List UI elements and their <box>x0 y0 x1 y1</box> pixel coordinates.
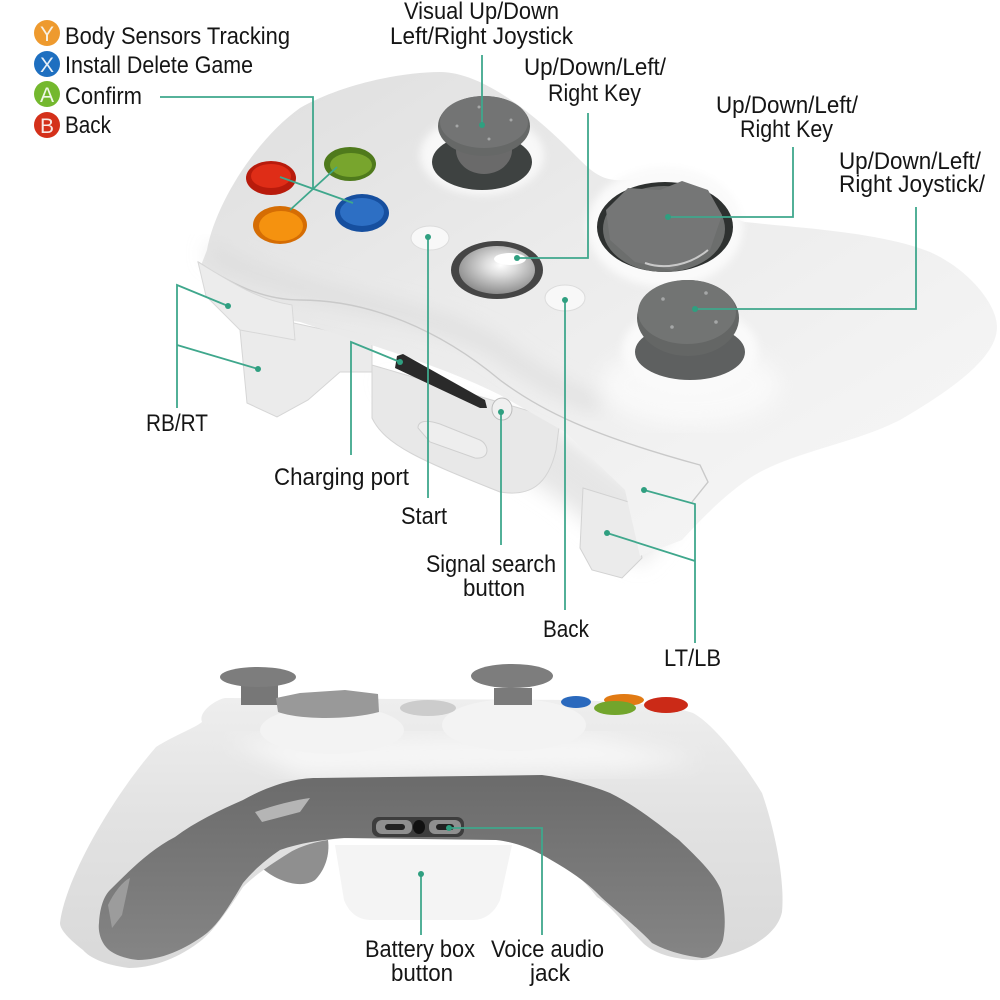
label: visual joystick <box>390 0 574 50</box>
legend B: Back <box>65 112 112 139</box>
label: right key d-pad: Up/Down/Left/ <box>716 92 858 119</box>
colour buttons <box>246 147 389 244</box>
label: signal search <box>426 551 556 602</box>
right trigger LT <box>580 488 642 578</box>
label: right key guide: Up/Down/Left/ <box>524 54 666 81</box>
label: voice audio jack <box>491 936 604 987</box>
label: right key d-pad <box>716 92 858 143</box>
label: voice audio jack: jack <box>529 960 571 987</box>
legend X: Install Delete Game <box>65 52 253 79</box>
back and start buttons <box>411 226 449 250</box>
label: LT/LB: LT/LB <box>664 645 721 672</box>
d-pad <box>587 167 743 287</box>
ports <box>372 817 464 837</box>
left joystick well and cap <box>420 115 544 195</box>
legend X: X <box>40 54 54 77</box>
grey panel <box>99 775 725 960</box>
label: signal search: button <box>463 575 525 602</box>
battery box <box>335 845 512 920</box>
left trigger RT <box>240 320 372 417</box>
legend A: Confirm <box>65 83 142 110</box>
label: right joystick: Right Joystick/ <box>839 171 985 198</box>
colour buttons <box>561 696 591 708</box>
seams <box>198 262 708 502</box>
charging port <box>395 354 487 408</box>
legend Y: Body Sensors Tracking <box>65 23 290 50</box>
label: back: Back <box>543 616 590 643</box>
upper shell highlight <box>230 735 700 775</box>
legend Y: Y <box>40 23 54 46</box>
label: right joystick: Up/Down/Left/ <box>839 148 981 175</box>
label: right key guide: Right Key <box>548 80 641 107</box>
rear grip behind battery <box>262 840 328 884</box>
label: start: Start <box>401 503 447 530</box>
legend B <box>34 112 112 139</box>
legend B: B <box>40 115 54 138</box>
label: right key guide <box>524 54 666 107</box>
legend A: A <box>40 84 54 107</box>
label: RB/RT: RB/RT <box>146 410 208 437</box>
label: right joystick <box>839 148 985 198</box>
guide button <box>451 241 543 299</box>
label: battery box: Battery box <box>365 936 475 963</box>
label: signal search: Signal search <box>426 551 556 578</box>
top controller illustration <box>198 72 997 578</box>
label: visual joystick: Left/Right Joystick <box>390 23 574 50</box>
legend A <box>34 81 142 110</box>
label: voice audio jack: Voice audio <box>491 936 604 963</box>
body shell <box>200 72 997 556</box>
label: charging port: Charging port <box>274 464 409 491</box>
leader lines <box>160 55 916 935</box>
signal search button <box>492 398 512 420</box>
label: right key d-pad: Right Key <box>740 116 833 143</box>
body shell <box>60 698 783 968</box>
label: battery box: button <box>391 960 453 987</box>
battery pack <box>372 365 560 493</box>
mounds and sticks <box>260 706 404 754</box>
bottom controller illustration <box>60 664 783 968</box>
right joystick well and cap <box>622 306 758 394</box>
legend <box>34 20 290 139</box>
body shading <box>210 250 600 405</box>
label: battery box <box>365 936 475 987</box>
panel reflections <box>255 798 310 822</box>
